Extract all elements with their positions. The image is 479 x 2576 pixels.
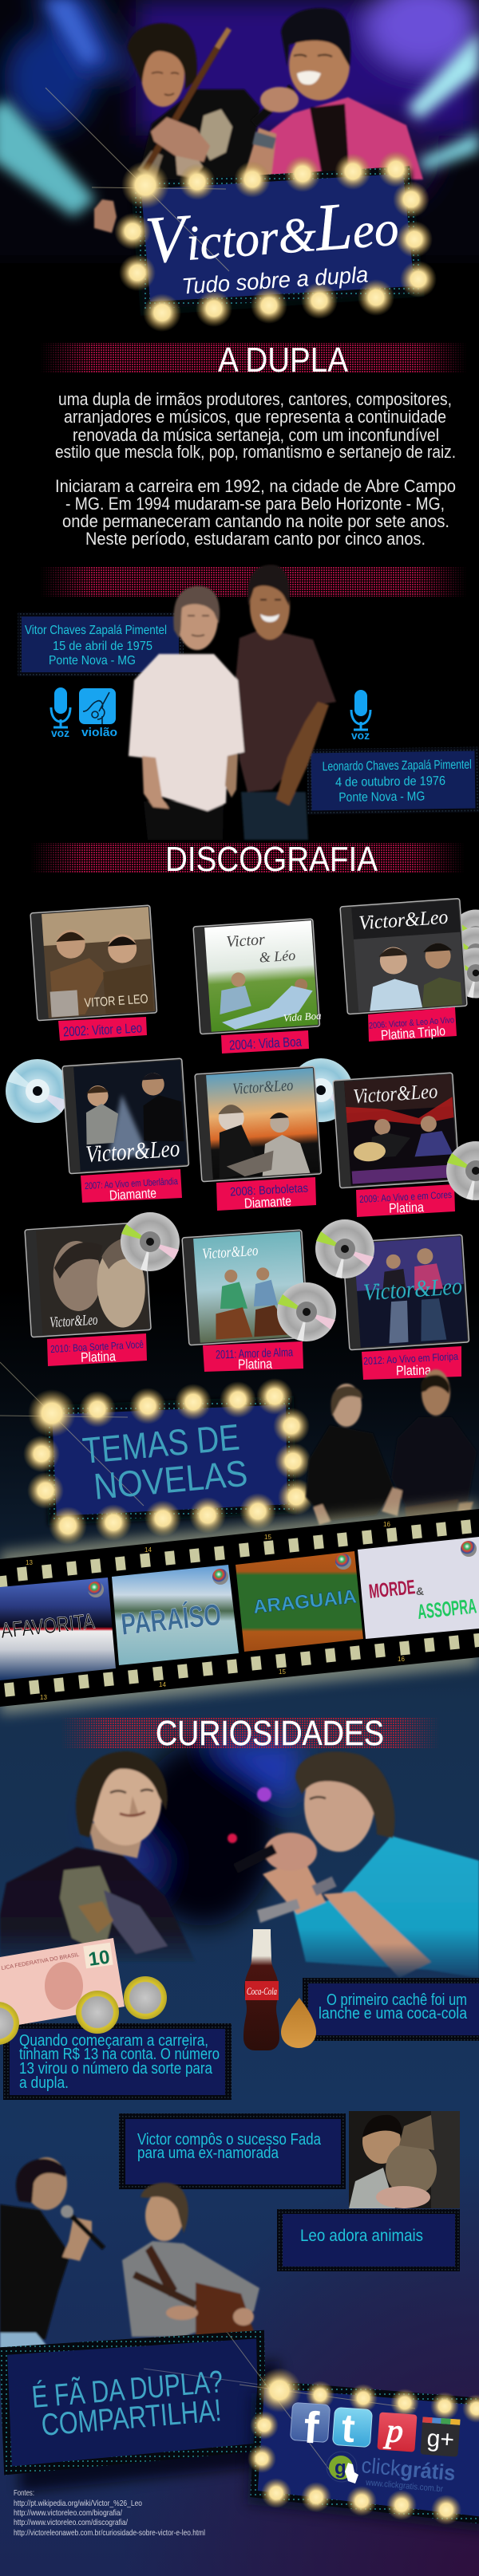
album: 2010 Boa Sorte Pra Você: Victor&Leo xyxy=(49,1312,98,1331)
label: 2010 Platina: 2010: Boa Sorte Pra Você xyxy=(50,1338,144,1355)
label: voz (Leonardo): voz xyxy=(351,729,370,742)
sign: share and logo xyxy=(228,2333,479,2532)
icon: microphone (Leonardo) xyxy=(351,690,370,730)
frame numbers: 14 xyxy=(159,1681,166,1688)
callout: Fada: Victor compôs o sucesso Fada xyxy=(137,2131,322,2149)
album: 2007 Ao Vivo em Uberlândia xyxy=(62,1058,189,1174)
label: 2009 Platina xyxy=(356,1184,455,1217)
photo: Victor on stage with guitar xyxy=(122,2183,259,2337)
album: 2004 Vida Boa: Vida Boa xyxy=(283,1010,322,1024)
icon: facebook: f xyxy=(302,2402,321,2453)
album: 2009 Ao Vivo e em Cores xyxy=(333,1073,460,1188)
callout: R$ 13 xyxy=(3,2023,232,2100)
disc: silver CD 2009 xyxy=(446,1141,479,1200)
sources: http://pt.wikipedia.org/wiki/Victor_%26_Leo xyxy=(14,2499,142,2508)
info box: Leonardo: 4 de outubro de 1976 xyxy=(335,774,445,790)
icon: microphone (Vitor) xyxy=(51,687,70,727)
icon: pinterest xyxy=(377,2412,418,2452)
logo: clickgrátis: g xyxy=(335,2457,346,2479)
info box: Vitor: Ponte Nova - MG xyxy=(49,654,136,668)
heading band: Discografia xyxy=(34,843,461,872)
label: 2008 Diamante xyxy=(216,1177,316,1211)
decorative band xyxy=(40,566,467,597)
label: 2009 Platina: Platina xyxy=(389,1199,425,1216)
icon: twitter xyxy=(332,2405,373,2452)
frame numbers: 16 xyxy=(383,1521,390,1528)
label: 2006 Platina Triplo: 2006: Victor & Leo Ao Vivo xyxy=(369,1015,454,1031)
photo: Victor with guitar xyxy=(94,23,260,233)
info box: Vitor: Vitor Chaves Zapalá Pimentel xyxy=(25,624,167,637)
label: 2012 Platina xyxy=(362,1346,461,1380)
icon: guitar tile xyxy=(79,688,116,724)
frame numbers: 16 xyxy=(398,1656,405,1663)
album: 2007 Ao Vivo em Uberlândia: Victor&Leo xyxy=(85,1136,180,1168)
sign: É fã da dupla, compartilha: COMPARTILHA! xyxy=(40,2393,223,2443)
album: 2004 Vida Boa: & Léo xyxy=(259,947,296,966)
sources: http://www.victoreleo.com/biografia/ xyxy=(14,2508,122,2518)
callout: Leo adora animais xyxy=(277,2209,460,2271)
frame: A Favorita: AFAVORITA xyxy=(0,1609,96,1643)
info box: Leonardo: Ponte Nova - MG xyxy=(338,790,425,805)
label: 2009 Platina: 2009: Ao Vivo e em Cores xyxy=(359,1189,452,1205)
label: 2008 Diamante: 2008: Borboletas xyxy=(230,1181,308,1199)
frame numbers: 13 xyxy=(26,1559,33,1566)
photo: Leo on stage with microphone xyxy=(0,2157,104,2349)
illustration: coca-cola bottle and coxinha: Coca-Cola xyxy=(247,1985,277,1997)
illustration: banknote and coins xyxy=(0,1938,167,2045)
callout: R$ 13: tinham R$ 13 na conta. O número xyxy=(19,2046,220,2063)
heading band: Discografia: DISCOGRAFIA xyxy=(165,840,378,879)
album: 2008 Borboletas: Victor&Leo xyxy=(232,1077,294,1098)
heading band: Curiosidades: CURIOSIDADES xyxy=(156,1714,384,1753)
frame numbers: 14 xyxy=(144,1546,152,1554)
frame numbers: 15 xyxy=(264,1534,271,1541)
frame: Araguaia: ARAGUAIA xyxy=(252,1586,358,1618)
photo: Leo singing in blue shirt xyxy=(236,1751,479,1978)
heading band: A Dupla xyxy=(43,343,464,372)
album: 2012 Ao Vivo em Floripa xyxy=(342,1235,469,1350)
label: 2008 Diamante: Diamante xyxy=(244,1193,291,1211)
label: 2007 Diamante xyxy=(81,1169,182,1203)
frame: Morde & Assopra xyxy=(358,1537,479,1639)
sources: http://www.victoreleo.com/discografia/ xyxy=(14,2518,128,2527)
illustration: banknote and coins: LICA FEDERATIVA DO BRASIL xyxy=(1,1952,80,1971)
text block: about the duo: renovada da música sertaneja, com um inconfundível xyxy=(73,425,439,445)
label: 2002 Vitor e Leo: 2002: Vitor e Leo xyxy=(63,1020,142,1040)
subtitle: Tudo sobre a dupla xyxy=(181,262,369,299)
logo: clickgrátis xyxy=(327,2452,457,2494)
disc: silver CD 2010 xyxy=(121,1212,180,1271)
sign: Temas de Novelas: NOVELAS xyxy=(92,1452,249,1507)
icon: pinterest: p xyxy=(382,2413,405,2451)
icon: google plus xyxy=(420,2416,461,2457)
heading band: Curiosidades xyxy=(63,1718,437,1748)
album: 2011 Amor de Alma: Victor&Leo xyxy=(202,1243,259,1262)
logo: clickgrátis: www.clickgratis.com.br xyxy=(365,2478,444,2494)
frame numbers xyxy=(26,1521,405,1701)
discs behind row albums xyxy=(289,910,479,1122)
album: 2006 Victor & Leo Ao Vivo xyxy=(340,899,467,1014)
album: 2002 Vitor e Leo xyxy=(30,905,157,1021)
album: 2011 Amor de Alma xyxy=(182,1230,309,1345)
sources xyxy=(14,2488,205,2538)
disc: blue CD 2007 xyxy=(6,1059,69,1123)
label: 2011 Platina: 2011: Amor de Alma xyxy=(216,1345,294,1362)
label: 2011 Platina xyxy=(203,1341,303,1372)
label: 2006 Platina Triplo xyxy=(368,1007,457,1043)
album: 2012 Ao Vivo em Floripa: Victor&Leo xyxy=(362,1273,463,1306)
sources: http://victoreleonaweb.com.br/curiosidade-sobre-victor-e-leo.html xyxy=(14,2528,205,2538)
photo: Leo singing in pink shirt xyxy=(244,8,423,179)
film strip: novela themes xyxy=(0,1501,479,1715)
photo: stage backdrop xyxy=(88,1743,299,1926)
logo: clickgrátis: clickgrátis xyxy=(360,2453,457,2485)
label: 2007 Diamante: Diamante xyxy=(109,1185,156,1203)
text block: about the duo xyxy=(55,389,456,549)
label: 2007 Diamante: 2007: Ao Vivo em Uberlândia xyxy=(85,1176,178,1191)
photo: Victor close-up xyxy=(0,1751,271,1962)
album: 2002 Vitor e Leo: VITOR E LEO xyxy=(84,992,148,1010)
icon: google plus: g+ xyxy=(426,2425,455,2453)
info box: Vitor: 15 de abril de 1975 xyxy=(53,640,152,653)
photo: brothers standing xyxy=(129,565,336,840)
label: voz (Vitor): voz xyxy=(51,727,69,739)
sign: É fã da dupla, compartilha: É FÃ DA DUPLA? xyxy=(30,2365,224,2415)
album: 2008 Borboletas xyxy=(195,1066,322,1182)
callout: Fada: para uma ex-namorada xyxy=(137,2145,279,2162)
callout: primeiro cachê xyxy=(303,1978,479,2041)
text block: about the duo: Iniciaram a carreira em 1992, na cidade de Abre Campo xyxy=(55,476,456,496)
label: violão: violão xyxy=(81,726,117,739)
label: 2010 Platina xyxy=(47,1333,147,1366)
heading band: A Dupla: A DUPLA xyxy=(218,341,349,380)
frame: Paraíso: PARAÍSO xyxy=(119,1597,223,1642)
label: 2011 Platina: Platina xyxy=(238,1357,273,1372)
sign lights xyxy=(247,2368,479,2525)
illustration: coca-cola bottle and coxinha xyxy=(243,1929,316,2050)
perforations top row xyxy=(0,1519,472,1591)
disc: silver CD 2012 xyxy=(315,1219,374,1278)
icon: facebook xyxy=(289,2401,331,2454)
perforations bottom row xyxy=(4,1633,479,1697)
label: 2010 Platina: Platina xyxy=(81,1349,117,1365)
sign: Temas de Novelas xyxy=(0,1362,315,1545)
frame numbers: 15 xyxy=(279,1668,286,1676)
album: 2004 Vida Boa: Victor xyxy=(226,931,266,951)
sign lights xyxy=(114,151,437,332)
hero stage background with light beams xyxy=(0,0,479,335)
album: 2004 Vida Boa xyxy=(193,919,323,1034)
label: 2012 Platina: Platina xyxy=(396,1363,432,1378)
sign: Victor & Leo title xyxy=(46,88,437,332)
text block: about the duo: onde permaneceram cantando na noite por sete anos. xyxy=(62,511,449,531)
frame: Morde & Assopra: & xyxy=(416,1585,424,1597)
info box: Leonardo xyxy=(307,746,479,814)
text block: about the duo: Neste período, estudaram canto por cinco anos. xyxy=(85,529,426,549)
label: 2002 Vitor e Leo xyxy=(58,1017,147,1041)
album: 2010 Boa Sorte Pra Você xyxy=(25,1223,151,1337)
title: Victor & Leo: Victor&Leo xyxy=(143,186,401,278)
sign: É fã da dupla, compartilha xyxy=(3,2334,279,2492)
callout: R$ 13: Quando começaram a carreira, xyxy=(19,2032,208,2050)
icon: twitter: t xyxy=(340,2405,357,2451)
sign: Temas de Novelas: TEMAS DE xyxy=(81,1416,241,1471)
photo: Leo with cat xyxy=(349,2111,460,2208)
callout: Leo adora animais: Leo adora animais xyxy=(300,2227,423,2245)
label: 2006 Platina Triplo: Platina Triplo xyxy=(380,1023,446,1043)
label: 2004 Vida Boa: 2004: Vida Boa xyxy=(229,1034,303,1053)
frame: Morde & Assopra: MORDE xyxy=(368,1576,416,1603)
label: 2012 Platina: 2012: Ao Vivo em Floripa xyxy=(363,1350,459,1367)
sign lights xyxy=(23,1378,315,1545)
album: 2009 Ao Vivo e em Cores: Victor&Leo xyxy=(352,1079,438,1108)
disc: silver CD 2011 xyxy=(277,1282,336,1341)
frame: A Favorita xyxy=(0,1578,116,1680)
callout: R$ 13: 13 virou o número da sorte para xyxy=(19,2060,213,2078)
callout: Fada xyxy=(119,2113,346,2189)
album: 2006 Victor & Leo Ao Vivo: Victor&Leo xyxy=(358,907,449,934)
frame numbers: 13 xyxy=(40,1694,47,1701)
frame: Araguaia xyxy=(236,1551,363,1652)
illustration: banknote and coins: 10 xyxy=(87,1946,111,1971)
callout: R$ 13: a dupla. xyxy=(19,2074,69,2092)
info box: Vitor xyxy=(18,612,184,676)
photo: brothers in black shirts xyxy=(306,1369,477,1525)
frame: Paraíso xyxy=(112,1565,239,1665)
label: 2004 Vida Boa xyxy=(221,1030,309,1054)
sources: Fontes: xyxy=(14,2488,34,2498)
